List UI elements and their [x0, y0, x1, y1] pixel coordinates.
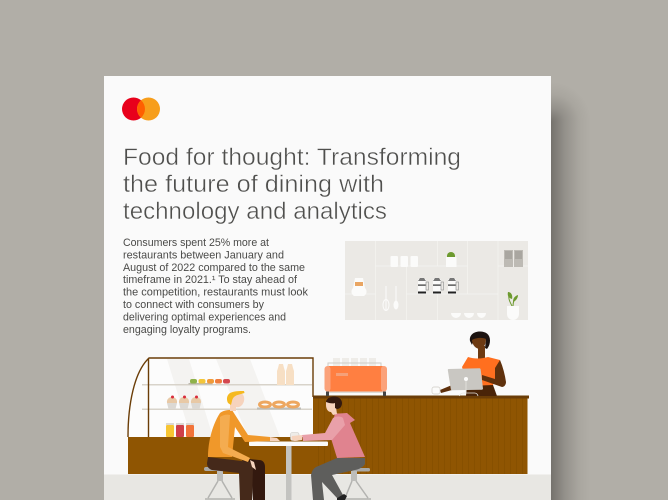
body text — [123, 237, 309, 336]
trousers — [311, 458, 365, 500]
floor — [104, 474, 551, 500]
espresso machine — [324, 358, 387, 396]
torso — [208, 410, 270, 457]
table — [249, 432, 328, 500]
body text: to connect with consumers by — [123, 299, 265, 311]
stool — [343, 468, 371, 499]
cup — [432, 387, 440, 394]
case frame — [128, 358, 313, 437]
barista forearm — [440, 385, 452, 393]
icon: french presses — [418, 278, 458, 294]
barista top — [462, 357, 500, 386]
shelves — [142, 385, 312, 409]
body text: restaurants between January and — [123, 250, 284, 262]
head — [326, 399, 337, 415]
icon: jars — [390, 256, 418, 267]
arm highlight — [220, 415, 250, 462]
barista head — [472, 338, 486, 349]
stool — [204, 467, 235, 499]
barista — [432, 332, 506, 396]
icon: coffee dripper — [351, 278, 367, 296]
laptop logo — [464, 377, 468, 381]
case base — [128, 437, 313, 474]
man on stool — [204, 391, 280, 500]
hair — [326, 396, 342, 409]
service counter — [313, 396, 529, 474]
title — [123, 144, 461, 225]
page panel — [104, 76, 551, 500]
hoodie — [330, 413, 365, 458]
juice jars — [166, 423, 194, 437]
icon: utensils — [383, 286, 398, 310]
body text: Consumers spent 25% more at — [123, 237, 269, 249]
body text: the competition, restaurants must look — [123, 286, 309, 298]
title: the future of dining with — [123, 171, 384, 198]
icon: cactus pot — [446, 252, 456, 267]
logo — [122, 98, 160, 120]
icon: boxes — [504, 250, 523, 267]
sleeve — [302, 416, 345, 441]
body text: August of 2022 compared to the same — [123, 262, 305, 274]
title: Food for thought: Transforming — [123, 144, 461, 171]
bagels — [260, 402, 298, 407]
barista trousers — [466, 385, 497, 396]
woman on stool — [292, 396, 371, 500]
case glass — [128, 358, 313, 437]
laptop — [448, 368, 483, 390]
hand — [292, 435, 302, 441]
macarons — [190, 379, 230, 384]
body text: engaging loyalty programs. — [123, 324, 251, 336]
hands — [250, 437, 280, 470]
barista neck — [478, 346, 485, 359]
page shadow — [551, 82, 591, 500]
far leg — [240, 458, 265, 500]
barista arm — [482, 360, 506, 387]
pastry case — [128, 358, 313, 474]
body text: delivering optimal experiences and — [123, 312, 286, 324]
title: technology and analytics — [123, 198, 387, 225]
near leg — [207, 457, 253, 500]
barista hair — [470, 332, 490, 349]
hair — [227, 391, 244, 405]
neck and head — [229, 392, 244, 411]
shoe — [337, 494, 347, 500]
icon: potted plant — [507, 292, 519, 320]
panel: back wall shelves — [345, 241, 528, 320]
table cup — [290, 432, 299, 440]
body text: timeframe in 2021.¹ To stay ahead of — [123, 274, 298, 286]
icon: cups — [451, 313, 486, 318]
bottles — [277, 364, 294, 385]
cupcakes — [167, 396, 201, 409]
